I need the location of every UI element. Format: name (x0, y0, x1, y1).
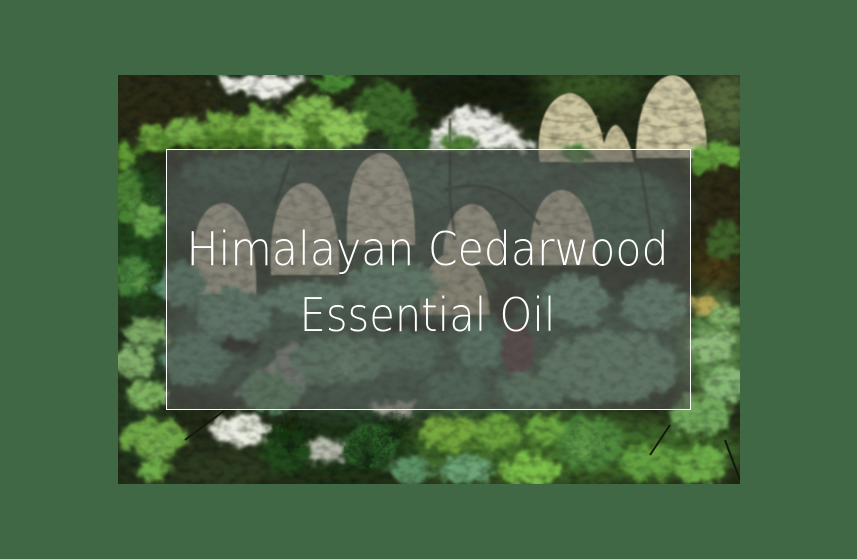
photo: blurred backdrop (105, 67, 755, 488)
photo: cedar branches and cones (105, 67, 755, 488)
heading: line one: Himalayan Cedarwood (186, 222, 668, 276)
photo: leaf shadow texture (118, 75, 740, 484)
photo: branches behind panel (274, 117, 655, 254)
heading: line two: Essential Oil (300, 288, 556, 342)
photo: distant foliage behind cones (180, 154, 675, 260)
infographic canvas (118, 75, 740, 484)
photo: bright branch upper left (115, 73, 593, 170)
photo: foliage behind panel (156, 261, 689, 412)
photo: right foliage (670, 142, 752, 435)
photo: cones upper right (539, 75, 707, 162)
photo: needle tufts (122, 192, 605, 468)
photo: left foliage (113, 165, 187, 481)
photo: dark branch lines (185, 410, 740, 480)
panel overlay (166, 150, 690, 410)
photo: sky gaps (212, 75, 540, 462)
photo: bottom foliage (261, 414, 726, 485)
title panel (166, 150, 690, 410)
photo: cones behind panel (191, 153, 596, 376)
